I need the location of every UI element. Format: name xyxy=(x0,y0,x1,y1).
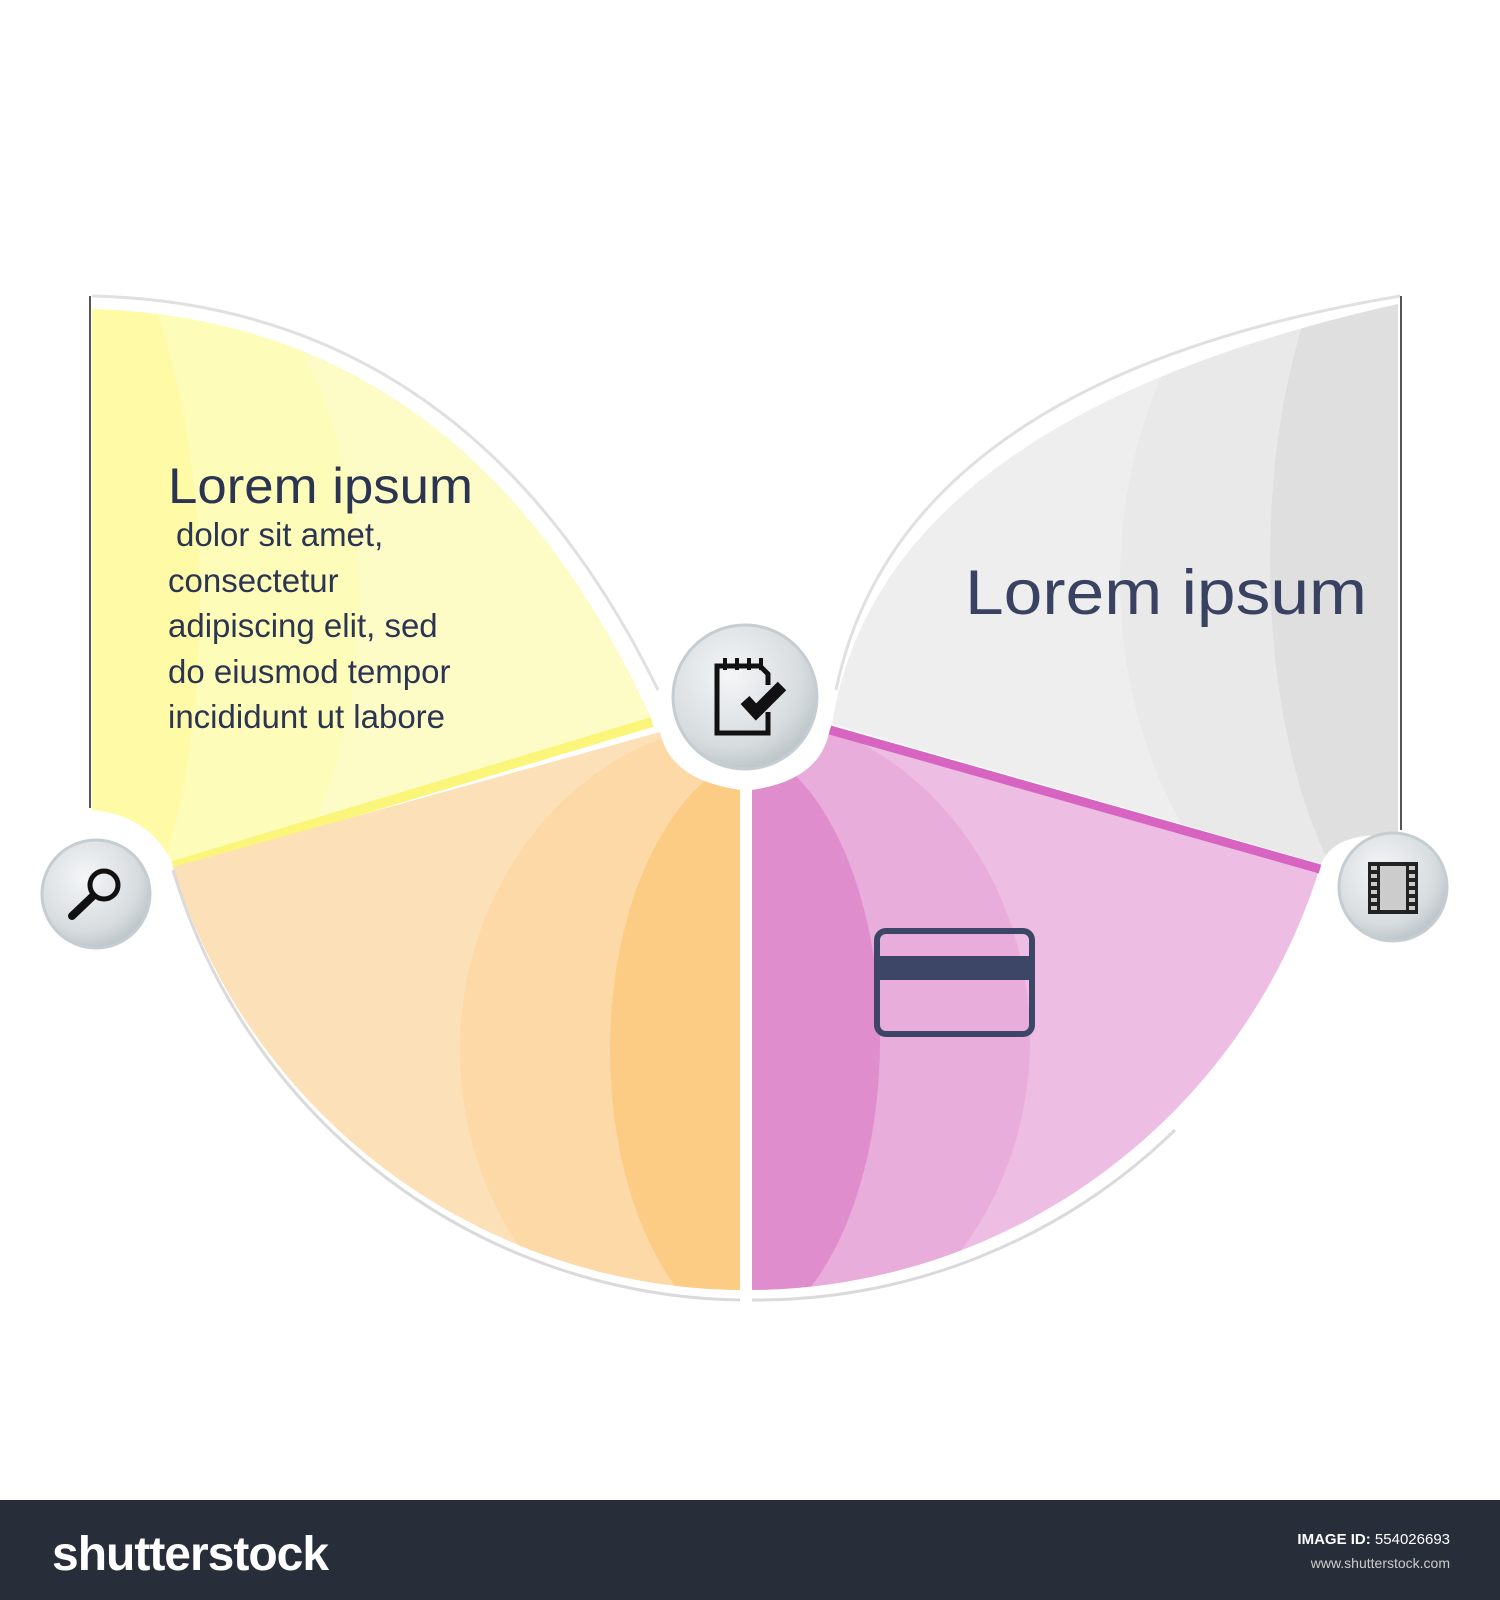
footer bar xyxy=(0,1500,1500,1600)
text: left heading and body xyxy=(168,458,473,735)
icon: film button xyxy=(1339,833,1447,941)
text: left heading and body: adipiscing elit, sed xyxy=(168,607,438,644)
icon: magnifier button xyxy=(42,840,150,948)
footer bar: IMAGE ID: 554026693 xyxy=(1297,1531,1450,1548)
panel: pink segment xyxy=(752,726,1322,1302)
icon: credit card xyxy=(877,931,1032,1034)
text: left heading and body: consectetur xyxy=(168,562,339,599)
text: right heading: Lorem ipsum xyxy=(965,558,1367,628)
icon: center notepad check button xyxy=(669,621,821,773)
text: left heading and body: do eiusmod tempor xyxy=(168,653,450,690)
footer bar: shutterstock xyxy=(52,1528,329,1581)
divider line xyxy=(742,790,750,1300)
panel: yellow segment xyxy=(89,294,660,867)
text: left heading and body: Lorem ipsum xyxy=(168,458,473,514)
panel: gray segment xyxy=(832,294,1402,864)
panel: orange segment xyxy=(172,732,740,1302)
text: left heading and body: incididunt ut labore xyxy=(168,698,445,735)
footer bar: www.shutterstock.com xyxy=(1310,1555,1450,1571)
text: left heading and body: dolor sit amet, xyxy=(176,516,383,553)
